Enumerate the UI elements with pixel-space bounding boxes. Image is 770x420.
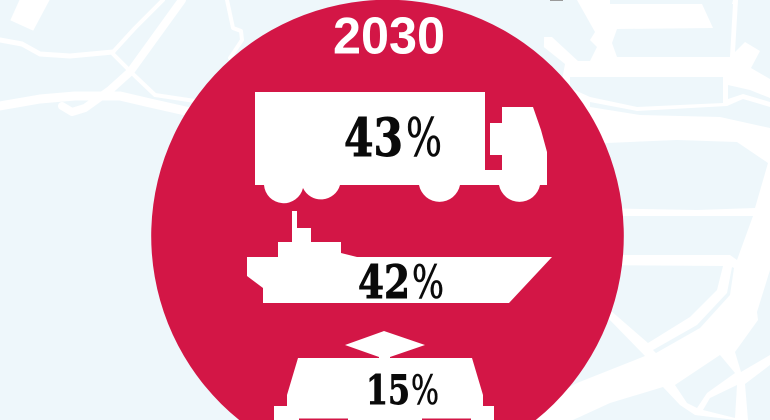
- icon: train: [274, 331, 494, 420]
- small grey mark: [550, 0, 563, 1]
- truck share: [255, 92, 547, 203]
- label: 43%: 43: [344, 108, 403, 169]
- year heading: 2030: [333, 8, 445, 66]
- label: 42%: %: [412, 255, 444, 309]
- red circle: [151, 0, 624, 420]
- icon: ship: [247, 211, 552, 303]
- label: 15%: %: [411, 368, 439, 414]
- label: 15%: 15: [366, 367, 410, 414]
- icon: truck: [255, 92, 547, 203]
- ship share: [247, 211, 552, 309]
- label: 42%: 42: [358, 255, 410, 309]
- map roads: right side: [530, 0, 770, 420]
- label: 43%: %: [406, 109, 442, 169]
- train share: [274, 331, 494, 420]
- map roads: left side: [0, 0, 242, 112]
